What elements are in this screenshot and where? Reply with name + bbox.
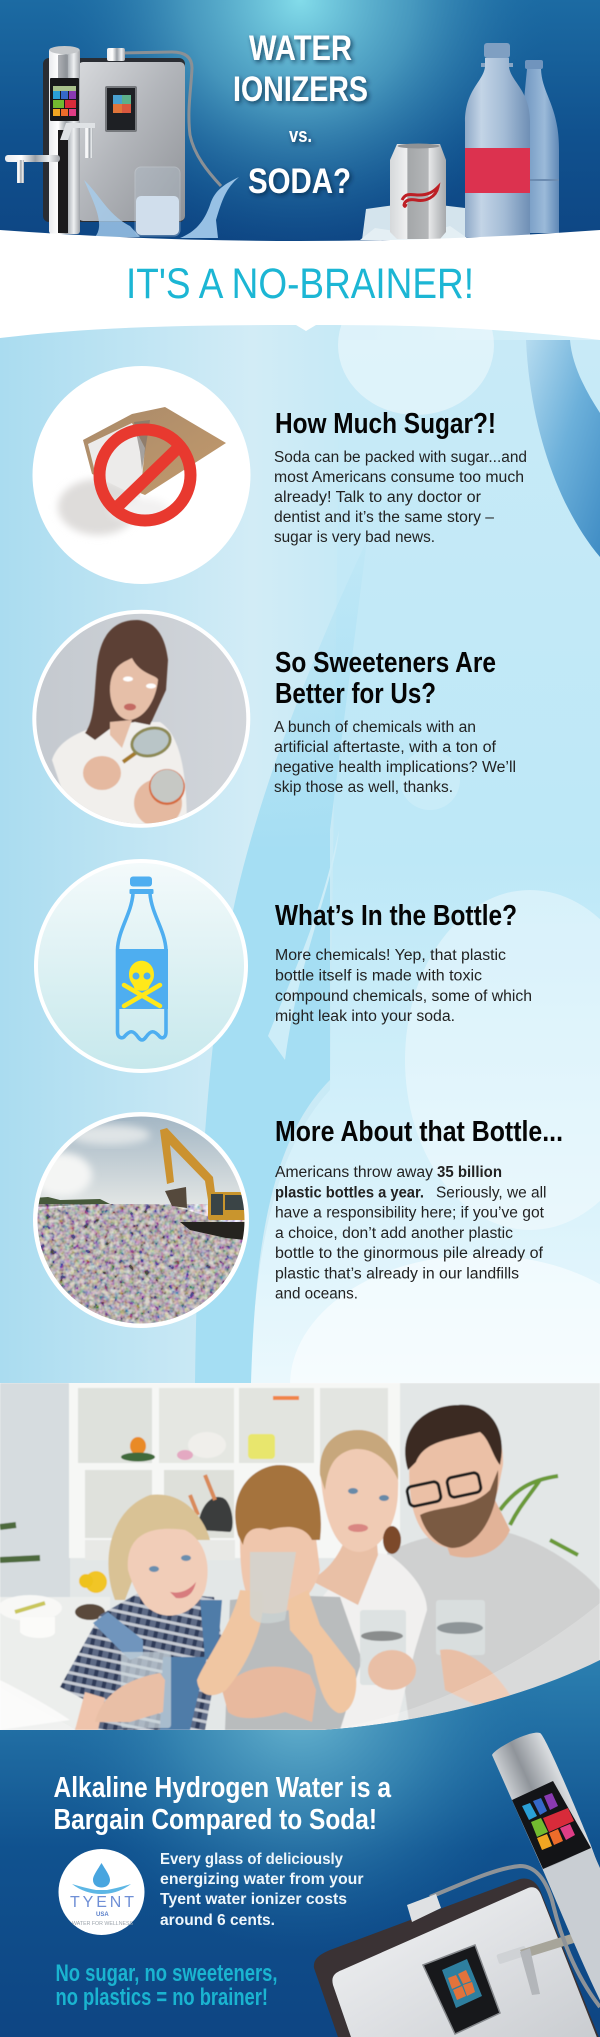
- boy's arms: [197, 1590, 356, 1713]
- splash right: [180, 177, 239, 238]
- title: vs.: [289, 125, 312, 147]
- man: [387, 1405, 600, 1730]
- body text: 35 billion: [437, 1164, 502, 1181]
- title: WATER: [249, 29, 352, 68]
- logo: Tyent USA: TYENT: [70, 1894, 134, 1911]
- subtitle: IT'S A NO-BRAINER!: [126, 260, 474, 308]
- shelving unit: [69, 1383, 400, 1560]
- sugar pile: [58, 479, 138, 535]
- panel: header blue banner: [0, 0, 600, 250]
- title: SODA?: [248, 162, 351, 201]
- faucet left: [5, 155, 60, 162]
- ice: [362, 205, 465, 240]
- text: six cents per glass: Every glass of deliciously: [160, 1851, 343, 1868]
- white banner with pointer: [0, 230, 600, 340]
- panel: sweeteners: [30, 610, 516, 830]
- heading: More About that Bottle...: [275, 1116, 563, 1148]
- table and dishes: [0, 1571, 110, 1730]
- body text: [275, 947, 532, 1025]
- icon: water ionizer machine with glass: [5, 46, 239, 238]
- text: six cents per glass: [160, 1851, 364, 1929]
- tower: [492, 1733, 600, 2000]
- body text: Americans throw away: [275, 1164, 433, 1181]
- room background: [70, 1383, 600, 1730]
- callout: no sugar no sweeteners: [56, 1960, 278, 2011]
- circle: landfill with excavator: [30, 1110, 255, 1330]
- panel: more about that bottle: [30, 1110, 563, 1330]
- heading: What’s In the Bottle?: [275, 900, 517, 932]
- ionizer unit body: [43, 58, 185, 222]
- unit screen: [423, 1945, 500, 2034]
- body text: already! Talk to any doctor or: [274, 489, 481, 506]
- bottle label: [116, 949, 168, 1009]
- faucet: [496, 1934, 574, 1995]
- icon: footer water ionizer machine: [314, 1733, 600, 2037]
- boy: [225, 1465, 362, 1730]
- body text: might leak into your soda.: [275, 1008, 455, 1025]
- heading: [275, 647, 496, 710]
- skull and crossbones: [124, 961, 160, 1006]
- logo: Tyent USA: [58, 1849, 144, 1935]
- callout: no sugar no sweeteners: No sugar, no sweeteners,: [56, 1960, 278, 1987]
- heading: bargain: [54, 1772, 392, 1836]
- photo: family drinking water: [0, 1383, 600, 1730]
- text: six cents per glass: Tyent water ionizer costs: [160, 1891, 347, 1908]
- logo: Tyent USA: USA: [96, 1912, 109, 1918]
- body text: sugar is very bad news.: [274, 529, 435, 546]
- tower screen: [512, 1781, 591, 1869]
- translucent white curve over photo: [330, 1604, 600, 1730]
- body text: most Americans consume too much: [274, 469, 524, 486]
- callout: no sugar no sweeteners: no plastics = no brainer!: [56, 1984, 268, 2011]
- woman's hand around boy: [222, 1667, 316, 1722]
- text: six cents per glass: around 6 cents.: [160, 1912, 275, 1929]
- icon: plastic bottles: [465, 43, 559, 237]
- body text: negative health implications? We’ll: [274, 759, 516, 776]
- hose: [118, 52, 221, 186]
- body text: plastic that’s already in our landfills: [275, 1266, 519, 1282]
- prohibition sign: [100, 430, 190, 520]
- hose: [430, 1866, 600, 2007]
- body text: compound chemicals, some of which: [275, 988, 532, 1005]
- bottle outline: [130, 876, 152, 886]
- body text: [274, 449, 527, 546]
- woman: [310, 1430, 427, 1730]
- body text: plastic bottles a year.: [275, 1184, 424, 1202]
- excavator: [160, 1128, 247, 1240]
- body text: and oceans.: [275, 1286, 358, 1302]
- title: [233, 29, 368, 201]
- body text: have a responsibility here; if you’ve got: [275, 1204, 545, 1222]
- body text: dentist and it’s the same story –: [274, 509, 494, 526]
- icon: soda can on ice: [360, 144, 470, 240]
- can: [390, 144, 446, 239]
- panel: footer blue section: [0, 1660, 600, 2037]
- body text: More chemicals! Yep, that plastic: [275, 947, 506, 964]
- heading: bargain: Bargain Compared to Soda!: [54, 1804, 377, 1836]
- circle: bottle with skull icon: [36, 861, 246, 1071]
- body text: skip those as well, thanks.: [274, 779, 453, 796]
- heading: bargain: Alkaline Hydrogen Water is a: [54, 1772, 392, 1804]
- body text: a choice, don’t add another plastic: [275, 1225, 513, 1242]
- girl: [60, 1494, 222, 1730]
- body text: Seriously, we all: [436, 1184, 546, 1202]
- burlap sack: [83, 407, 226, 495]
- circle: sugar sack with prohibition sign: [32, 366, 250, 584]
- tower: [49, 46, 80, 234]
- glass of water: [135, 167, 180, 236]
- heading: So Sweeteners Are: [275, 647, 496, 679]
- small bottle: [523, 60, 559, 233]
- heading: Better for Us?: [275, 678, 436, 710]
- circle: woman inspecting a can: [30, 610, 255, 830]
- water glasses: [121, 1552, 485, 1728]
- plants: [500, 1476, 578, 1555]
- unit body: [314, 1879, 600, 2037]
- body text: Soda can be packed with sugar...and: [274, 449, 527, 466]
- body text: [274, 719, 516, 796]
- heading: How Much Sugar?!: [275, 408, 496, 440]
- body text: bottle itself is made with toxic: [275, 968, 482, 984]
- faucet right: [60, 123, 95, 140]
- panel: light blue water background: [0, 275, 600, 1515]
- body text: bottle to the ginormous pile already of: [275, 1245, 544, 1262]
- body text: [275, 1164, 546, 1302]
- logo: Tyent USA: WATER FOR WELLNESS: [72, 1921, 133, 1927]
- large bottle: [465, 43, 530, 237]
- splash left: [84, 180, 140, 237]
- body text: A bunch of chemicals with an: [274, 719, 476, 736]
- bottle label: [465, 148, 530, 193]
- panel: how much sugar: [32, 366, 527, 584]
- text: six cents per glass: energizing water from your: [160, 1871, 364, 1888]
- panel: what's in the bottle: [36, 861, 532, 1071]
- hands holding glasses: [95, 1649, 520, 1722]
- body text: artificial aftertaste, with a ton of: [274, 739, 497, 756]
- title: IONIZERS: [233, 70, 368, 109]
